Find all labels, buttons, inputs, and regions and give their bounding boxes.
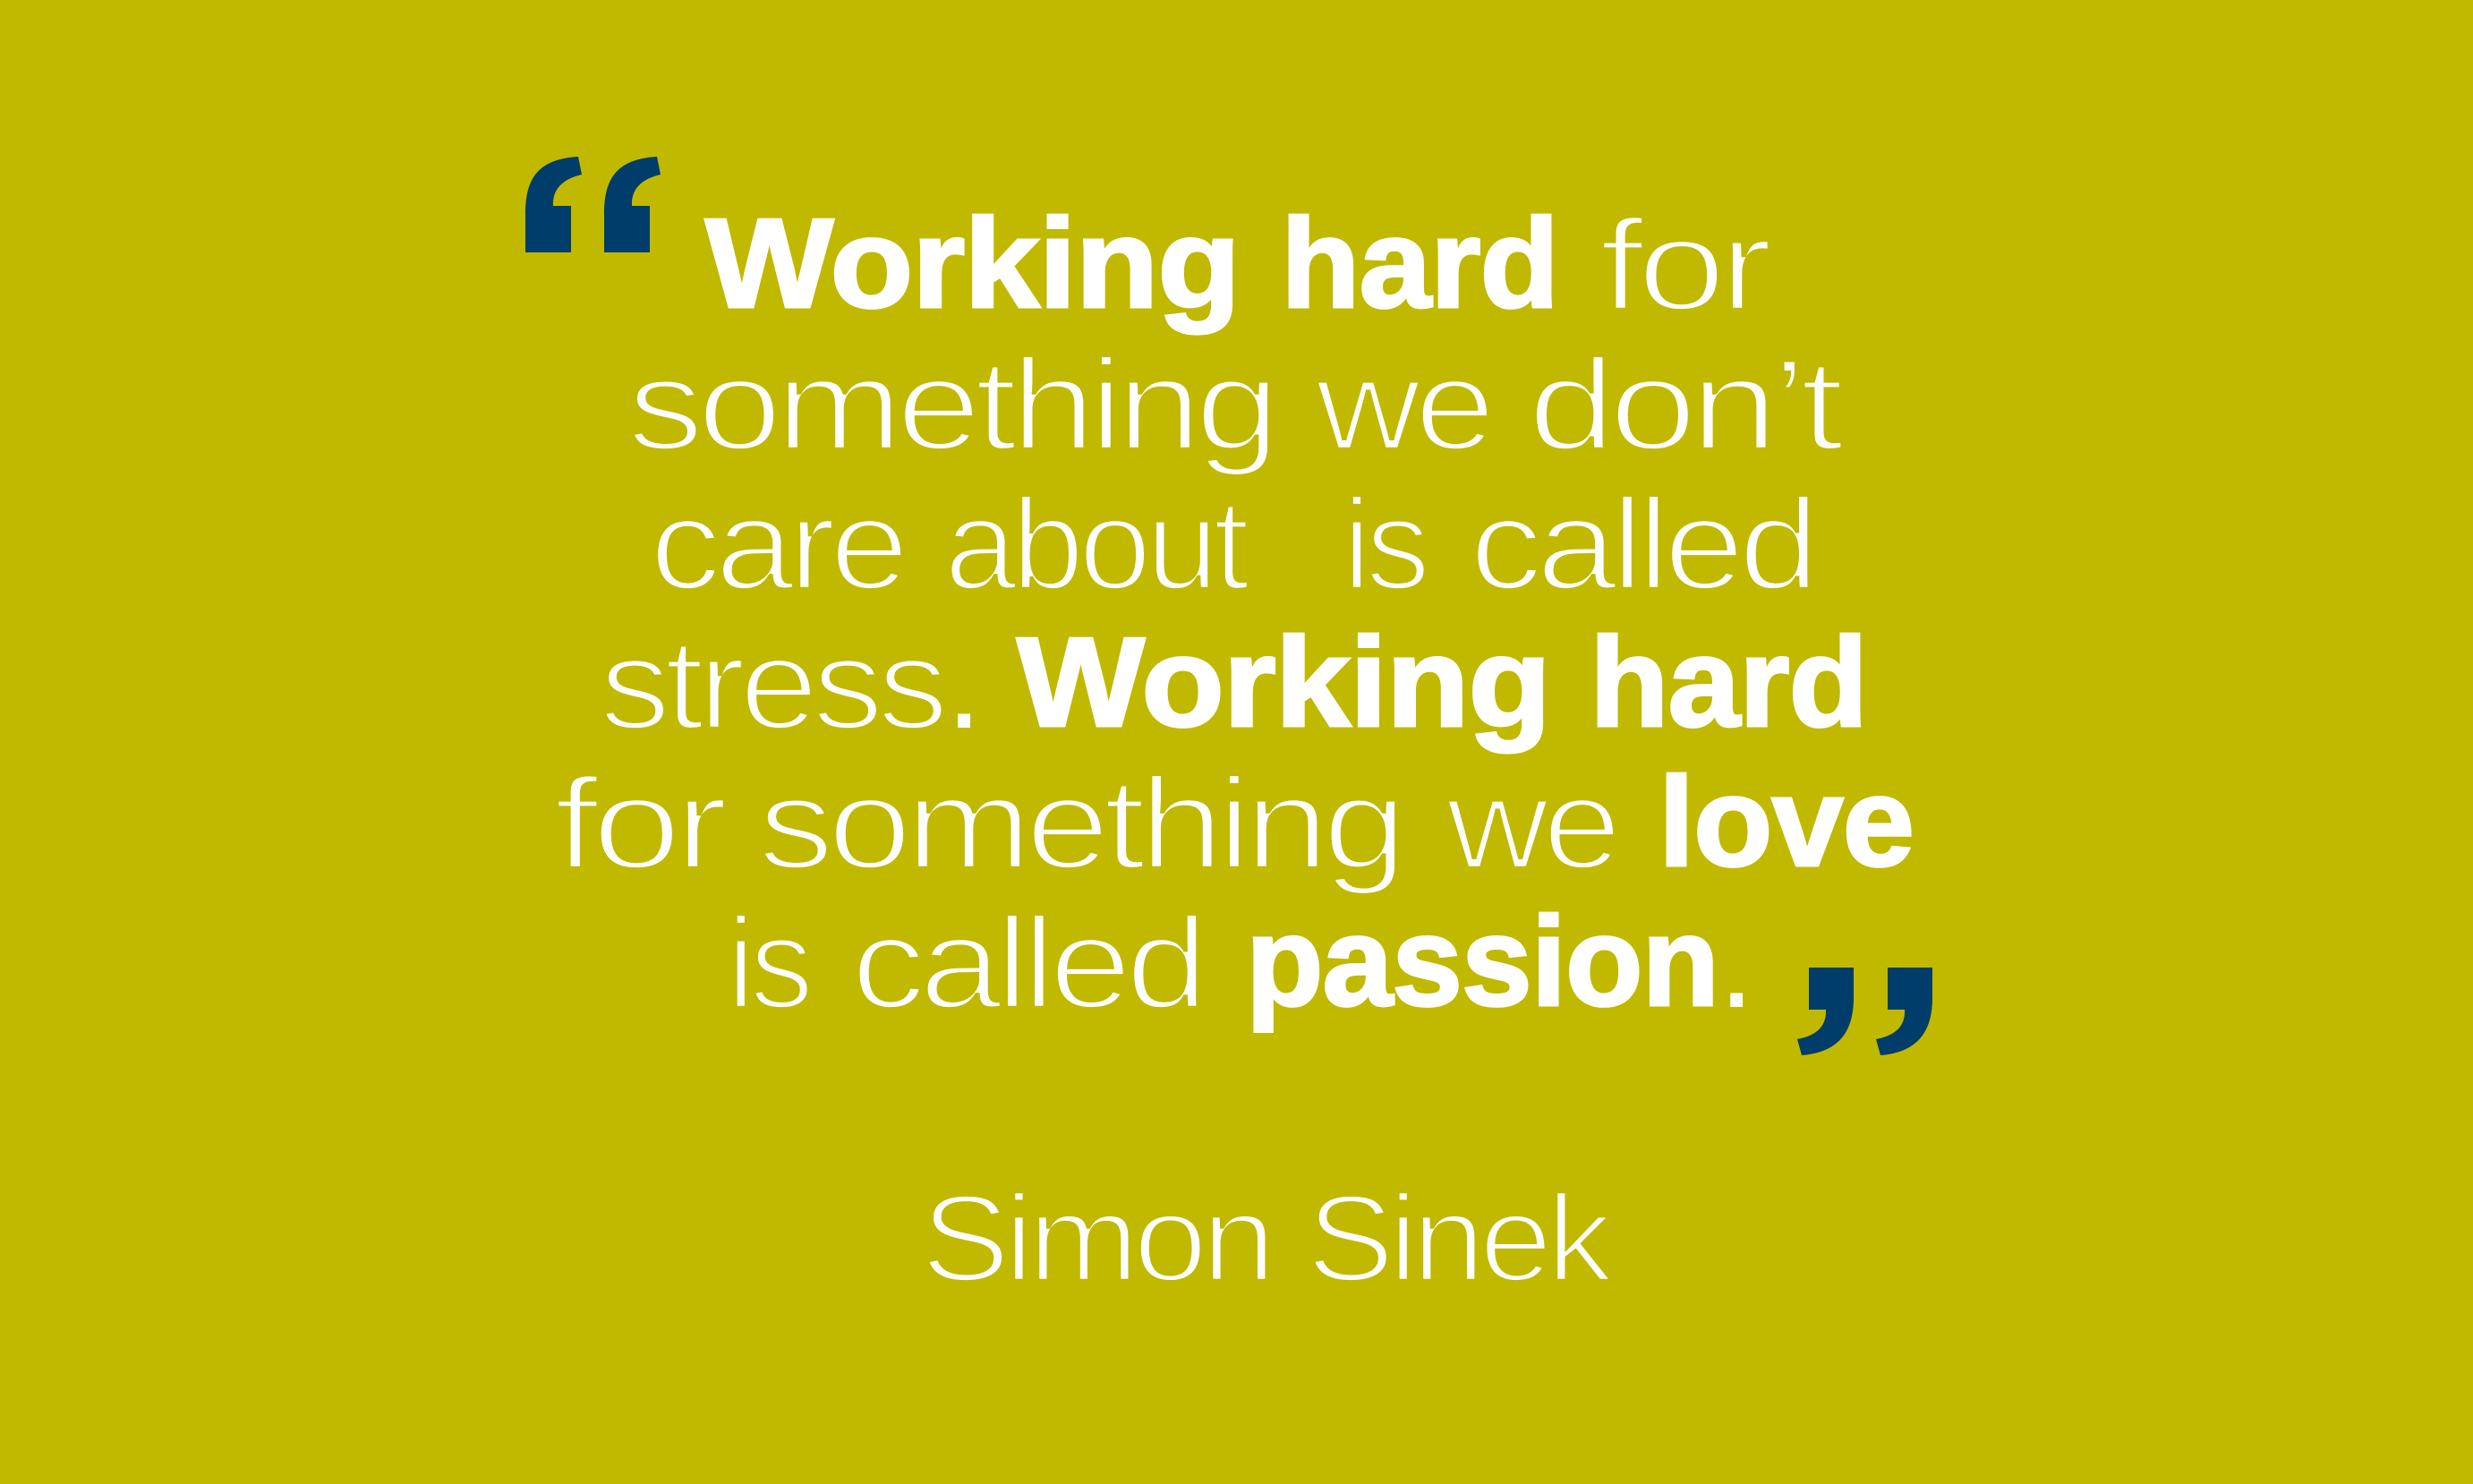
quote line 2: something xyxy=(627,332,1274,477)
quote line 1 xyxy=(705,192,1770,337)
quote line 3: about xyxy=(944,472,1249,617)
attribution: Simon Sinek: Sinek xyxy=(1307,1170,1613,1308)
quote line 4: hard xyxy=(1590,611,1867,754)
quote line 5 xyxy=(554,751,1914,896)
quote line 3: care xyxy=(650,472,903,617)
quote line 5: something xyxy=(758,751,1401,896)
quote line 4 xyxy=(600,610,1867,756)
quote line 6: passion xyxy=(1246,891,1718,1033)
attribution: Simon Sinek xyxy=(921,1170,1613,1308)
quote line 5: for xyxy=(554,751,726,896)
quote line 6: . xyxy=(1718,890,1754,1035)
quote line 1: hard xyxy=(1281,192,1558,335)
quote line 4: stress xyxy=(600,611,944,756)
quote line 4: . xyxy=(946,610,982,755)
quote line 6: is xyxy=(727,891,809,1036)
quote line 2: we xyxy=(1315,332,1489,477)
attribution: Simon Sinek: Simon xyxy=(921,1170,1270,1308)
quote text xyxy=(554,192,1914,1036)
quote line 4: Working xyxy=(1017,611,1550,754)
quote line 3: called xyxy=(1470,472,1813,617)
quote line 1: Working xyxy=(705,192,1240,335)
quote line 5: we xyxy=(1445,751,1616,896)
icon: closing quotation mark xyxy=(1797,968,1932,1055)
quote line 3 xyxy=(650,472,1813,617)
quote line 1: for xyxy=(1599,192,1770,337)
quote line 6 xyxy=(727,890,1754,1036)
icon: opening quotation mark xyxy=(525,157,661,252)
quote line 2: don’t xyxy=(1528,332,1844,477)
quote line 5: love xyxy=(1659,751,1914,893)
quote line 3: is xyxy=(1343,472,1426,617)
quote line 2 xyxy=(627,332,1844,477)
quote line 6: called xyxy=(851,891,1202,1036)
